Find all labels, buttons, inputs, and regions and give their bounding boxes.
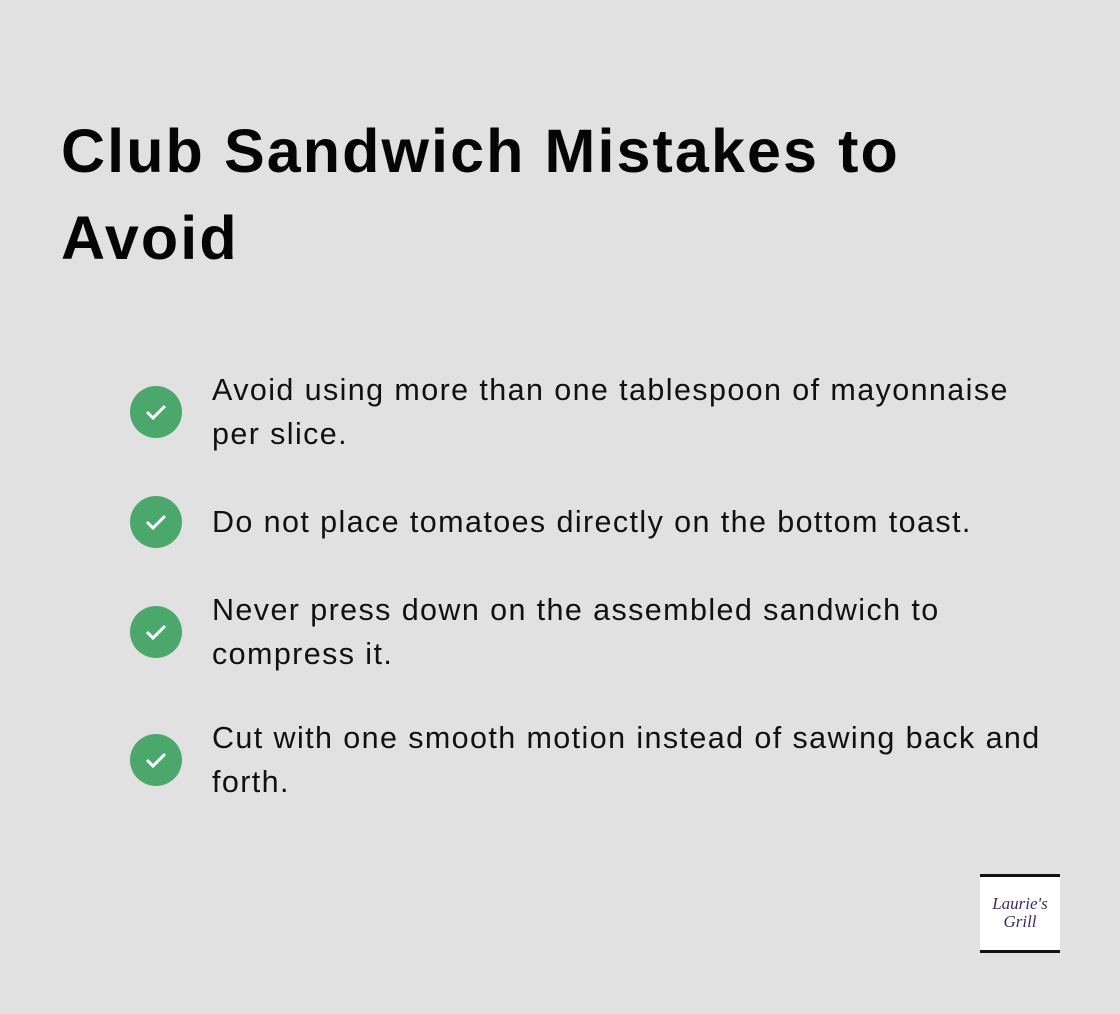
icon: check 3 [130, 606, 182, 658]
text 3: compress it. [212, 637, 393, 671]
text 1: per slice. [212, 417, 348, 451]
icon: check 4 [130, 734, 182, 786]
text 3: Never press down on the assembled sandwich to [212, 593, 940, 627]
text 4 [212, 721, 1041, 799]
title: Avoid [61, 204, 239, 272]
logo [980, 874, 1060, 953]
text 1 [212, 373, 1009, 451]
logo: Laurie's [992, 894, 1048, 913]
text 1: Avoid using more than one tablespoon of mayonnaise [212, 373, 1009, 407]
text 4: Cut with one smooth motion instead of sawing back and [212, 721, 1041, 755]
text 3 [212, 593, 940, 671]
text 4: forth. [212, 765, 290, 799]
title [61, 117, 900, 272]
logo: Grill [1003, 912, 1037, 931]
icon: check 1 [130, 386, 182, 438]
title: Club Sandwich Mistakes to [61, 117, 900, 185]
text 2: Do not place tomatoes directly on the bottom toast. [212, 505, 972, 539]
icon: check 2 [130, 496, 182, 548]
